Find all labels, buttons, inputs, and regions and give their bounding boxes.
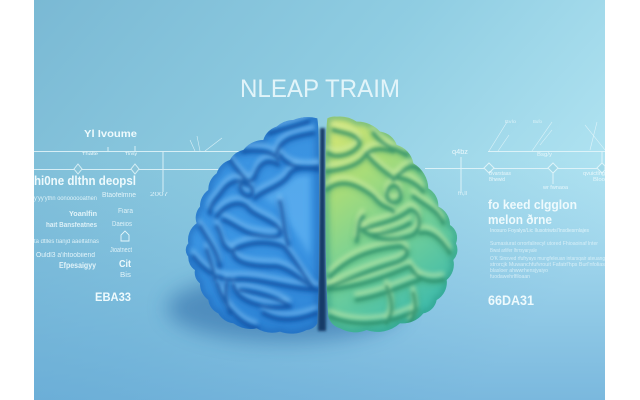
right panel text: fn,ll (458, 191, 467, 197)
left panel text: Btaofelmne (102, 192, 136, 199)
right panel text: strorcjk Muwanchfufvrouit Fafatrl'hps Burl'nfolias (490, 262, 605, 268)
left hemisphere (186, 117, 319, 334)
icon: house (121, 231, 129, 241)
right sulci (327, 130, 450, 323)
right panel text: Bvlo (505, 119, 517, 124)
centre fissure (318, 128, 326, 331)
left panel text: Fiara (118, 208, 133, 215)
right panel text: blasloer ahwwrhensjyaiyo (490, 268, 548, 274)
left panel text: hait Bansfeatnes (46, 222, 97, 229)
left sulci (193, 122, 318, 328)
right panel text: O'K Sinsved rfufryays mungfeleuan intarsqair ateuang (490, 256, 605, 262)
left panel text: y'yy'ythn oonoooooathen (34, 196, 97, 202)
left gyrus glow (260, 175, 310, 257)
right panel text (452, 119, 605, 308)
brain shadow (167, 274, 403, 342)
left panel text: Tlnsy (125, 151, 138, 156)
left panel text: hi0ne dlthn deopsl (34, 173, 136, 188)
left panel text: Thalte (82, 151, 99, 156)
right panel text: Bvarstaas (489, 171, 511, 177)
right panel text: Bloo (593, 177, 605, 183)
left panel text: Efpesaigyy (59, 261, 96, 270)
brain (180, 110, 462, 340)
right panel text: Bwat arlifer lhrrsyaryale (490, 248, 537, 254)
left panel text: Jioatnect (110, 247, 132, 254)
left panel text: EBA33 (95, 290, 131, 304)
right panel text: Bsg/y (537, 152, 553, 158)
right timeline (425, 122, 605, 192)
left panel text: Daeiios (112, 221, 132, 228)
right hemisphere (326, 116, 458, 332)
left panel text (34, 129, 169, 304)
title: NLEAP TRAIM (240, 75, 400, 103)
right panel text: 66DA31 (488, 292, 534, 308)
right panel text: Sumasiurat orrorfalirecyl utored Fhioaoinaf lnter (490, 241, 598, 247)
right panel text: fuodawehrlfiloaan (490, 274, 530, 280)
right panel text: q4bz (452, 149, 469, 156)
left panel text: 2007 (150, 192, 169, 198)
right panel text: wr fwnaoa (542, 185, 569, 191)
left panel text: Yoanlfin (69, 209, 97, 218)
right panel text: Inosuro Foyalys/Lic Ilusotriwtsl'lnsdiesrnlajes (490, 228, 589, 234)
right highlights (326, 124, 449, 317)
right panel text: qvuictlng (583, 171, 605, 177)
right panel text: fo keed clgglon (488, 197, 577, 212)
right edge shading (326, 116, 457, 332)
right broad shade (327, 130, 450, 323)
left panel text: Yl Ivoume (84, 129, 137, 140)
right panel text: Bhwwid (489, 177, 505, 183)
left edge shading (186, 117, 319, 334)
left timeline (34, 136, 240, 192)
right panel text: melon ðrne (488, 212, 552, 227)
left panel text: Bis (120, 270, 131, 279)
left broad shade (193, 122, 318, 328)
right panel text: Bufo (533, 119, 542, 124)
left highlights (193, 116, 318, 322)
left panel text: Ouldl3 a'ihtoobiiend (36, 252, 95, 259)
left panel text: ta dtlles tianjd aaelfatnas (34, 239, 99, 245)
left panel text: Cit (119, 259, 132, 270)
